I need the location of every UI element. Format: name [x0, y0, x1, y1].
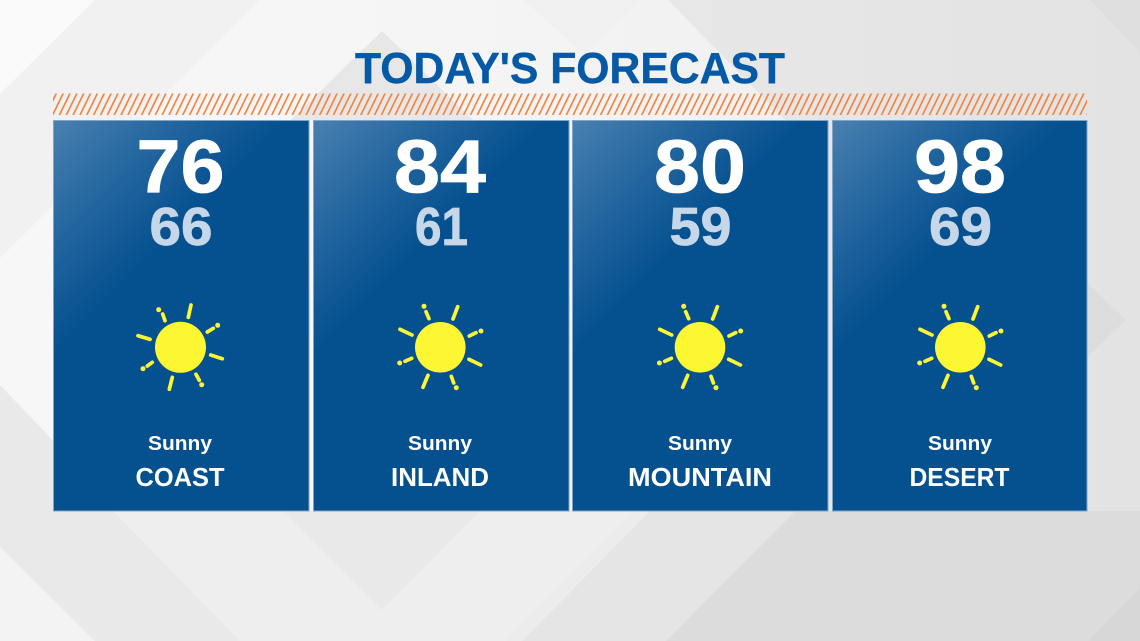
- mountain condition: Sunny: [668, 433, 733, 455]
- mountain low temperature: 59: [670, 197, 732, 257]
- desert high temperature: 98: [914, 124, 1006, 208]
- inland high temperature: 84: [394, 124, 486, 208]
- panel: coast: [54, 120, 309, 511]
- desert region name: DESERT: [910, 462, 1010, 492]
- mountain high temperature: 80: [654, 124, 746, 208]
- inland low temperature: 61: [415, 197, 468, 257]
- coast high temperature: 76: [136, 124, 224, 208]
- panel: mountain: [572, 120, 828, 511]
- inland region name: INLAND: [391, 462, 489, 492]
- desert condition: Sunny: [928, 433, 993, 455]
- icon: sun: [917, 304, 1004, 390]
- inland condition: Sunny: [408, 433, 473, 455]
- icon: sun: [397, 304, 484, 390]
- panel: inland: [314, 120, 569, 511]
- desert low temperature: 69: [929, 197, 992, 257]
- orange hatched stripe: [53, 94, 1087, 115]
- title: TODAY'S FORECAST: [355, 44, 785, 93]
- coast region name: COAST: [136, 462, 225, 492]
- coast condition: Sunny: [148, 433, 213, 455]
- panel: desert: [832, 120, 1087, 511]
- icon: sun: [138, 305, 222, 389]
- coast low temperature: 66: [150, 197, 212, 257]
- icon: sun: [657, 304, 743, 390]
- mountain region name: MOUNTAIN: [628, 462, 772, 492]
